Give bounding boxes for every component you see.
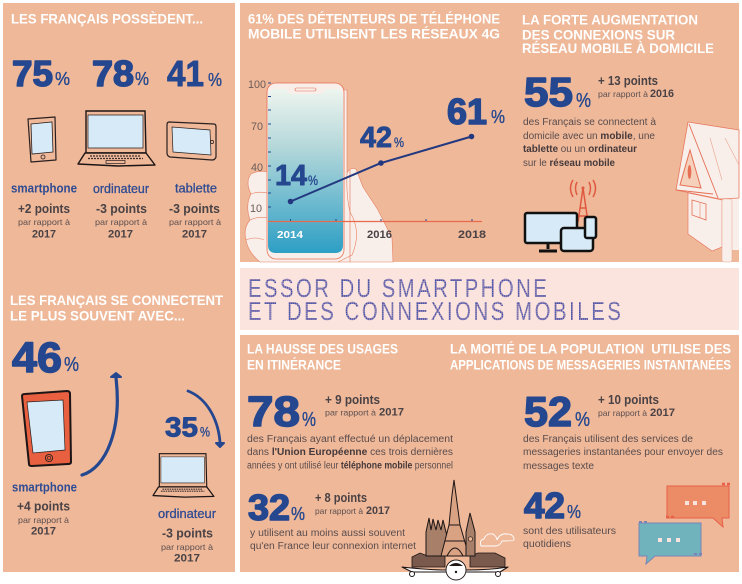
arrow: down	[188, 391, 224, 447]
line chart: 4G usage: 2018	[458, 229, 486, 241]
banner: essor du smartphone	[240, 268, 739, 330]
text: messageries: des Français utilisent des services de	[523, 434, 693, 445]
text: déplacement: années y ont utilisé leur téléphone mobile personnel	[247, 460, 453, 472]
stat: 61%: %	[491, 107, 505, 127]
label: ordinateur: ordinateur	[158, 506, 217, 521]
label: tablette: tablette	[175, 180, 217, 196]
stat: 75%: %	[55, 69, 70, 89]
change: smartphone +4 points	[17, 500, 70, 538]
stat: 14%: 14	[275, 160, 307, 192]
text: déplacement: des Français ayant effectué un déplacement	[247, 434, 453, 445]
heading: 61% 4G: 61% DES DÉTENTEURS DE TÉLÉPHONE	[248, 10, 500, 26]
change: +8 points	[315, 491, 390, 517]
stat: 52%: 52	[524, 388, 572, 435]
change: ordinateur -3 points: -3 points	[162, 526, 213, 540]
heading: 61% 4G	[248, 10, 500, 42]
stat: 42%: %	[567, 502, 581, 522]
text: messageries: messages texte	[523, 461, 594, 472]
stat: 42%: 42	[360, 122, 392, 154]
change: ordinateur -3 points: par rapport à	[161, 542, 213, 552]
change: +8 points: par rapport à	[315, 506, 363, 516]
change: smartphone +2 points: +2 points	[18, 202, 70, 216]
change: ordinateur -3 points: 2017	[174, 552, 200, 564]
line chart: 4G usage	[248, 79, 486, 241]
change: +8 points: + 8 points	[315, 491, 367, 505]
text: déplacement: dans l'Union Européenne ces trois dernières	[247, 447, 453, 458]
text: messageries	[523, 434, 723, 472]
panel: les français possèdent / se connectent	[3, 3, 235, 572]
change: +9 points	[325, 393, 404, 418]
icon: antenna and devices	[525, 180, 596, 251]
line chart: 4G usage: 70	[251, 121, 263, 133]
stat: 52%: %	[575, 409, 590, 431]
change: +13 points	[598, 74, 674, 100]
heading: les français se connectent: LES FRANÇAIS SE CONNECTENT	[10, 292, 223, 308]
arrow: up	[82, 373, 121, 475]
change: +10 points: par rapport à	[598, 408, 647, 418]
stat: 35%: %	[200, 424, 210, 440]
icon: laptop	[78, 111, 155, 166]
heading: forte augmentation: RÉSEAU MOBILE À DOMICILE	[522, 40, 714, 56]
change: ordinateur -3 points: 2017	[108, 228, 133, 240]
change: tablette -3 points: 2017	[182, 228, 207, 240]
text: utilisateurs quotidiens	[523, 526, 616, 550]
change: smartphone +2 points	[18, 202, 70, 240]
label: smartphone: smartphone	[12, 480, 77, 494]
line chart: 4G usage: 100	[248, 79, 266, 91]
heading: forte augmentation: LA FORTE AUGMENTATION	[522, 12, 698, 28]
change: smartphone +4 points: par rapport à	[18, 515, 69, 525]
stat: 32%: %	[291, 504, 305, 524]
text: utilisateurs quotidiens: sont des utilisateurs	[523, 526, 616, 537]
change: ordinateur -3 points	[161, 526, 213, 564]
text: domicile	[523, 117, 656, 169]
heading: les français possèdent: LES FRANÇAIS POSSÈDENT...	[11, 10, 203, 26]
icon: blue speech bubble	[639, 522, 702, 564]
heading: les français se connectent: LE PLUS SOUVENT AVEC...	[10, 308, 185, 324]
change: +8 points: 2017	[366, 505, 390, 517]
stat: 75%: 75	[12, 53, 53, 94]
change: ordinateur -3 points: par rapport à	[95, 217, 147, 227]
change: tablette -3 points	[169, 202, 221, 240]
change: smartphone +4 points: 2017	[31, 526, 56, 538]
change: +9 points: + 9 points	[325, 393, 380, 407]
icon: orange speech bubble	[666, 484, 730, 527]
banner: essor du smartphone: ESSOR DU SMARTPHONE	[248, 274, 547, 303]
stat: 55%: %	[576, 90, 591, 112]
stat: 55%	[524, 69, 591, 115]
stat: 42%: 42	[524, 485, 565, 526]
change: +10 points: 2017	[650, 407, 675, 419]
stat: 35%: 35	[165, 412, 198, 442]
illustration: hand holding phone	[245, 83, 393, 262]
text: messageries: messageries instantanées pour envoyer des	[523, 447, 723, 458]
text: connexion internet	[250, 528, 416, 552]
stat: 61%: 61	[447, 91, 487, 132]
change: +13 points: + 13 points	[598, 74, 658, 88]
stat: 78%: %	[302, 409, 316, 431]
heading: forte augmentation	[522, 12, 714, 56]
text: domicile: des Français se connectent à	[523, 117, 656, 128]
change: +10 points: + 10 points	[598, 393, 659, 407]
stat: 14%: %	[308, 172, 318, 188]
stat: 41%: %	[208, 70, 222, 90]
line chart: 4G usage: 10	[250, 203, 262, 215]
stat: 55%: 55	[524, 69, 573, 115]
heading: 61% 4G: MOBILE UTILISENT LES RÉSEAUX 4G	[248, 26, 500, 42]
text: utilisateurs quotidiens: quotidiens	[523, 539, 571, 550]
illustration: house	[676, 122, 739, 262]
text: connexion internet: qu'en France leur connexion internet	[250, 541, 416, 552]
panel: itinérance et messageries	[240, 335, 739, 580]
text: déplacement	[247, 434, 453, 472]
banner: essor du smartphone: ET DES CONNEXIONS MOBILES	[248, 297, 621, 326]
stat: 75%	[12, 53, 70, 94]
stat: 78%: 78	[247, 388, 300, 436]
stat: 78%: %	[135, 69, 149, 89]
illustration: european landmarks and plane	[402, 480, 514, 580]
stat: 35%	[165, 412, 210, 442]
icon: red smartphone	[22, 391, 71, 466]
change: smartphone +2 points: par rapport à	[18, 217, 70, 227]
change: +10 points	[598, 393, 675, 419]
heading: hausse des usages: EN ITINÉRANCE	[247, 356, 341, 372]
change: ordinateur -3 points: -3 points	[96, 202, 147, 216]
text: connexion internet: y utilisent au moins aussi souvent	[250, 528, 405, 539]
heading: moitié de la population	[450, 340, 731, 372]
stat: 78%: 78	[92, 53, 134, 94]
change: tablette -3 points: -3 points	[169, 202, 220, 216]
heading: hausse des usages	[247, 340, 398, 372]
text: domicile: tablette ou un ordinateur	[523, 144, 637, 155]
text: domicile: sur le réseau mobile	[523, 158, 615, 169]
stat: 61%	[447, 91, 505, 132]
icon: smartphone	[28, 117, 56, 162]
icon: small laptop	[153, 454, 214, 497]
text: domicile: domicile avec un mobile, une	[523, 131, 655, 142]
line chart: 4G usage: 2016	[367, 229, 392, 241]
stat: 42%: %	[394, 134, 404, 150]
stat: 46%: 46	[12, 334, 62, 382]
stat: 78%	[247, 388, 316, 436]
panel: réseaux 4G et connexions à domicile	[240, 3, 739, 580]
stat: 46%: %	[64, 354, 79, 376]
icon: tablet	[167, 122, 216, 160]
change: +9 points: par rapport à	[325, 408, 376, 418]
change: +13 points: 2016	[650, 88, 674, 100]
label: smartphone: smartphone	[11, 182, 77, 196]
stat: 41%: 41	[167, 53, 204, 94]
line chart: 4G usage: 40	[251, 162, 263, 174]
stat: 32%: 32	[248, 487, 290, 528]
line chart: 4G usage: 2014	[277, 229, 303, 241]
change: +13 points: par rapport à	[598, 89, 648, 99]
change: ordinateur -3 points	[95, 202, 147, 240]
heading: forte augmentation: DES CONNEXIONS SUR	[522, 26, 675, 42]
change: +9 points: 2017	[379, 406, 404, 418]
heading: hausse des usages: LA HAUSSE DES USAGES	[247, 340, 398, 356]
heading: les français se connectent	[10, 292, 223, 324]
change: smartphone +4 points: +4 points	[17, 500, 70, 514]
change: tablette -3 points: par rapport à	[169, 217, 221, 227]
label: ordinateur: ordinateur	[93, 181, 150, 196]
change: smartphone +2 points: 2017	[32, 228, 56, 240]
